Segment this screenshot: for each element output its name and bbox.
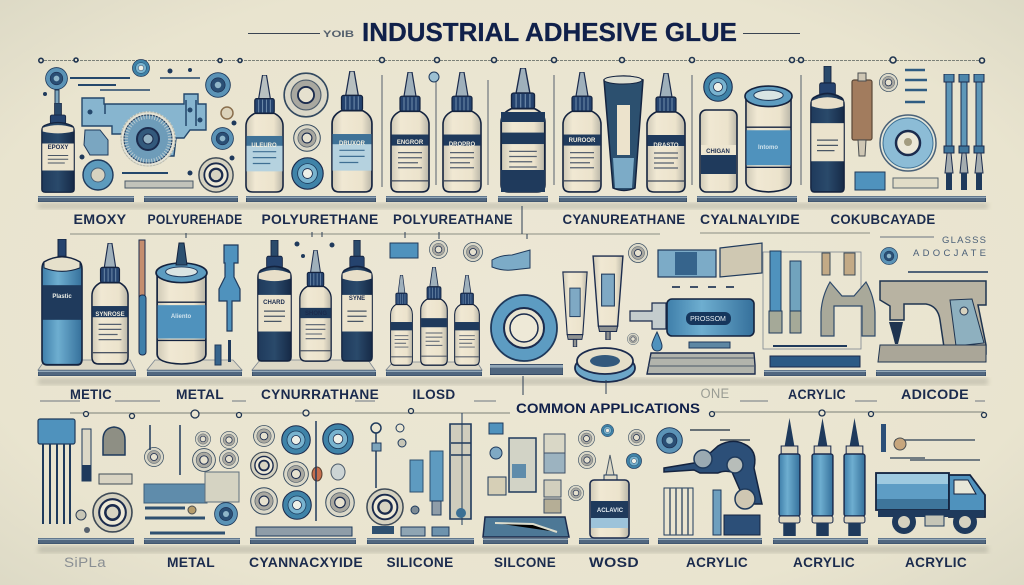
icon: small parts (43, 59, 236, 192)
panel: silicone parts (367, 413, 471, 536)
panel: jar and can (692, 73, 801, 192)
panel: blue block and rods (38, 419, 132, 533)
panel: bottles and tube (563, 72, 685, 192)
panel: metal parts (144, 425, 239, 533)
icon: blue machine (82, 94, 206, 190)
labels: row 2: ILOSD (412, 387, 456, 402)
labels: row 1: POLYUREHADE (148, 212, 242, 227)
panel: robot arm (657, 428, 762, 535)
panel: bottles with discs (246, 71, 372, 192)
panel: parts set (811, 66, 984, 192)
connector line: row 3 top (40, 376, 986, 418)
labels: row 2: ONE (700, 386, 730, 401)
labels: row 1: CYANUREATHANE (562, 212, 686, 227)
panel: metal can (156, 243, 240, 365)
panel: two bottles: ENGROR (397, 140, 424, 146)
labels: row 3: ACRYLIC (686, 555, 748, 570)
labels: row 1: EMOXY (74, 212, 126, 227)
panel: wosd jar: ACLAVIC (597, 508, 624, 514)
icon: epoxy canister: EPOXY (48, 145, 68, 151)
panel: three bottles: SYNE (349, 296, 365, 302)
panel: clamps (763, 251, 875, 367)
labels: row 3: WOSD (589, 555, 639, 570)
panel: truck (876, 424, 985, 534)
shelves: row 2 (38, 360, 988, 385)
labels: row 3: SILCONE (494, 555, 556, 570)
labels: row 3: METAL (167, 555, 215, 570)
panel: ring and tubes (491, 244, 648, 382)
panel: glue gun machine: ADOCJATE (913, 248, 986, 259)
labels: row 1: CYALNALYIDE (700, 212, 800, 227)
panel: wosd jar (568, 424, 645, 538)
labels: row 3 (64, 555, 967, 570)
panel: three bottles: CHARD (263, 300, 285, 306)
panel: bottles with discs: ULEURO (251, 143, 277, 149)
labels: row 2 (70, 386, 969, 402)
connector line: top (39, 57, 985, 63)
panel: three bottles (258, 240, 372, 361)
labels: row 2: ADICODE (901, 387, 969, 402)
panel: small bottles (390, 240, 482, 365)
panel: injector: PROSSOM (690, 316, 726, 323)
labels: row 2: ACRYLIC (788, 387, 846, 402)
labels: row 1: POLYURETHANE (262, 212, 378, 227)
labels: row 3: SiPLa (64, 555, 106, 570)
panel: acrylic cartridges (779, 418, 865, 536)
labels: row 2: METAL (176, 387, 224, 402)
panel: bottles with discs: DRUXOR (339, 141, 366, 147)
panel: two bottles: DROPRO (449, 142, 475, 148)
title (248, 17, 800, 47)
labels: row 1 (74, 212, 936, 227)
heading: common applications: COMMON APPLICATIONS (516, 401, 700, 416)
connector line: row 2 top (70, 206, 870, 239)
labels: row 3: ACRYLIC (793, 555, 855, 570)
panel: metic: Plastic (52, 294, 72, 300)
panel: injector (630, 243, 762, 374)
panel: discs grid (251, 421, 354, 536)
panel: three bottles: SHONG (305, 311, 327, 317)
panel: epoxy canister and machine (42, 59, 236, 192)
shelves: row 3 (38, 538, 988, 553)
panel: two bottles (382, 72, 488, 192)
panel: bottles and tube: DRASTO (653, 143, 679, 149)
panel: bottles and tube: RUROOR (569, 138, 596, 144)
panel: metic (42, 239, 146, 365)
shelves: row 1 (38, 196, 988, 209)
labels: row 1: COKUBCAYADE (830, 212, 936, 227)
panel: glue gun machine (878, 235, 988, 362)
labels: row 2: METIC (70, 387, 112, 402)
panel: jar and can: CHIGAN (706, 149, 730, 155)
title: YOIB (323, 29, 355, 39)
panel: glue gun machine: GLASSS (942, 235, 986, 246)
panel: jar and can: Intomo (758, 145, 778, 151)
labels: row 2: CYNURRATHANE (261, 387, 379, 402)
panel: silicone schematic (483, 423, 569, 537)
title: INDUSTRIAL ADHESIVE GLUE (362, 17, 737, 47)
labels: row 3: SILICONE (386, 555, 454, 570)
panel: metal can: Aliento (171, 314, 191, 320)
panel: dark bottle (501, 68, 554, 192)
icon: epoxy canister (42, 68, 74, 192)
labels: row 3: ACRYLIC (905, 555, 967, 570)
labels: row 1: POLYUREATHANE (393, 212, 513, 227)
labels: row 3: CYANNACXYIDE (249, 555, 363, 570)
panel: metic: SYNROSE (95, 312, 125, 318)
